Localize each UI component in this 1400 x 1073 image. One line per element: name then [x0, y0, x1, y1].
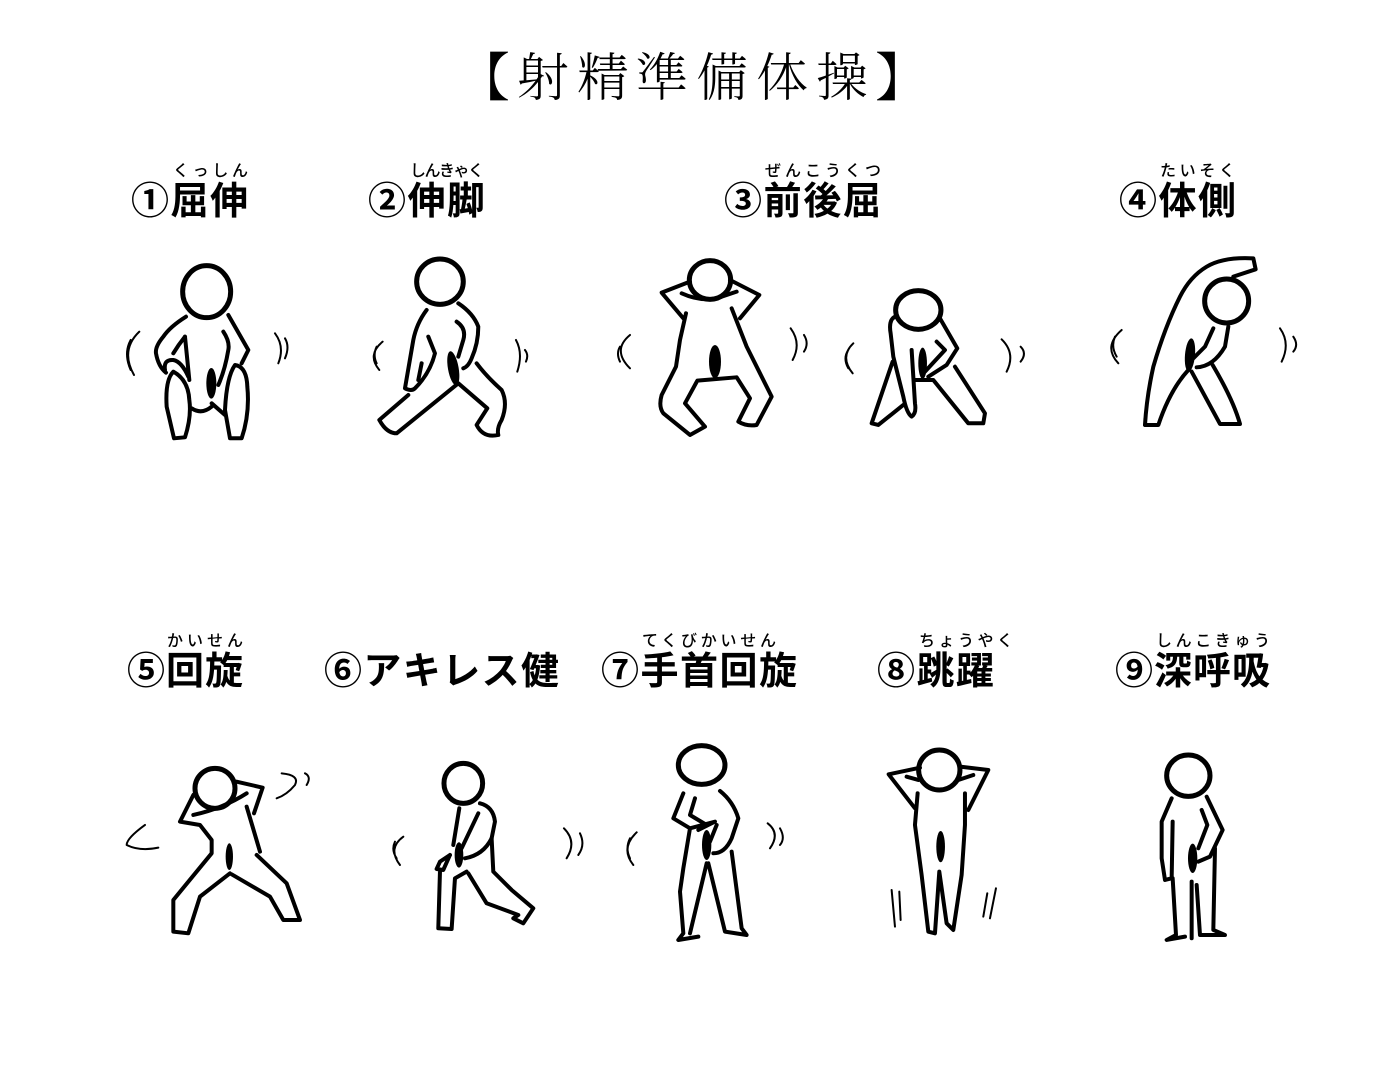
heading 8: ちょうやく	[919, 632, 1013, 650]
heading 1: ①屈伸	[131, 181, 248, 223]
heading 2	[368, 162, 485, 223]
figure 1: 屈伸	[127, 266, 287, 438]
figure 3b: 前後屈 forward	[845, 291, 1024, 425]
title: 精	[577, 36, 629, 111]
heading 7	[601, 632, 797, 693]
heading 2: しんきゃく	[410, 162, 484, 180]
figure 5: 回旋	[127, 768, 309, 933]
title: 】	[875, 36, 927, 111]
heading 5: ⑤回旋	[127, 651, 243, 693]
heading 9: ⑨深呼吸	[1115, 651, 1270, 693]
figure 6: アキレス健	[393, 763, 582, 929]
title: 備	[696, 36, 748, 111]
heading 2: ②伸脚	[368, 181, 485, 223]
heading 9	[1115, 632, 1270, 693]
figure 4: 体側	[1111, 258, 1296, 425]
title: 【	[458, 36, 510, 111]
heading 8: ⑧跳躍	[877, 651, 994, 693]
figure 3a: 前後屈 backward	[618, 261, 807, 435]
figure 8: 跳躍	[889, 750, 996, 933]
figure 7: 手首回旋	[627, 746, 783, 940]
heading 7: てくびかいせん	[642, 632, 776, 650]
heading 9: しんこきゅう	[1156, 632, 1270, 650]
heading 7: ⑦手首回旋	[601, 651, 797, 693]
title: 操	[816, 36, 868, 111]
figure 9: 深呼吸	[1162, 755, 1225, 940]
heading 3: ぜんこうくつ	[765, 163, 881, 180]
heading 1: くっしん	[173, 163, 248, 180]
heading 5: かいせん	[167, 633, 243, 650]
heading 6: ⑥アキレス健	[324, 651, 559, 693]
heading 4: たいそく	[1160, 162, 1235, 180]
heading 3: ③前後屈	[724, 181, 881, 223]
heading 4: ④体側	[1119, 181, 1236, 223]
title: 準	[636, 36, 688, 111]
heading 8	[877, 632, 1013, 693]
title	[458, 36, 927, 111]
heading 4	[1119, 162, 1236, 223]
title: 体	[756, 36, 808, 111]
figure 2: 伸脚	[374, 259, 527, 436]
title: 射	[517, 36, 569, 111]
